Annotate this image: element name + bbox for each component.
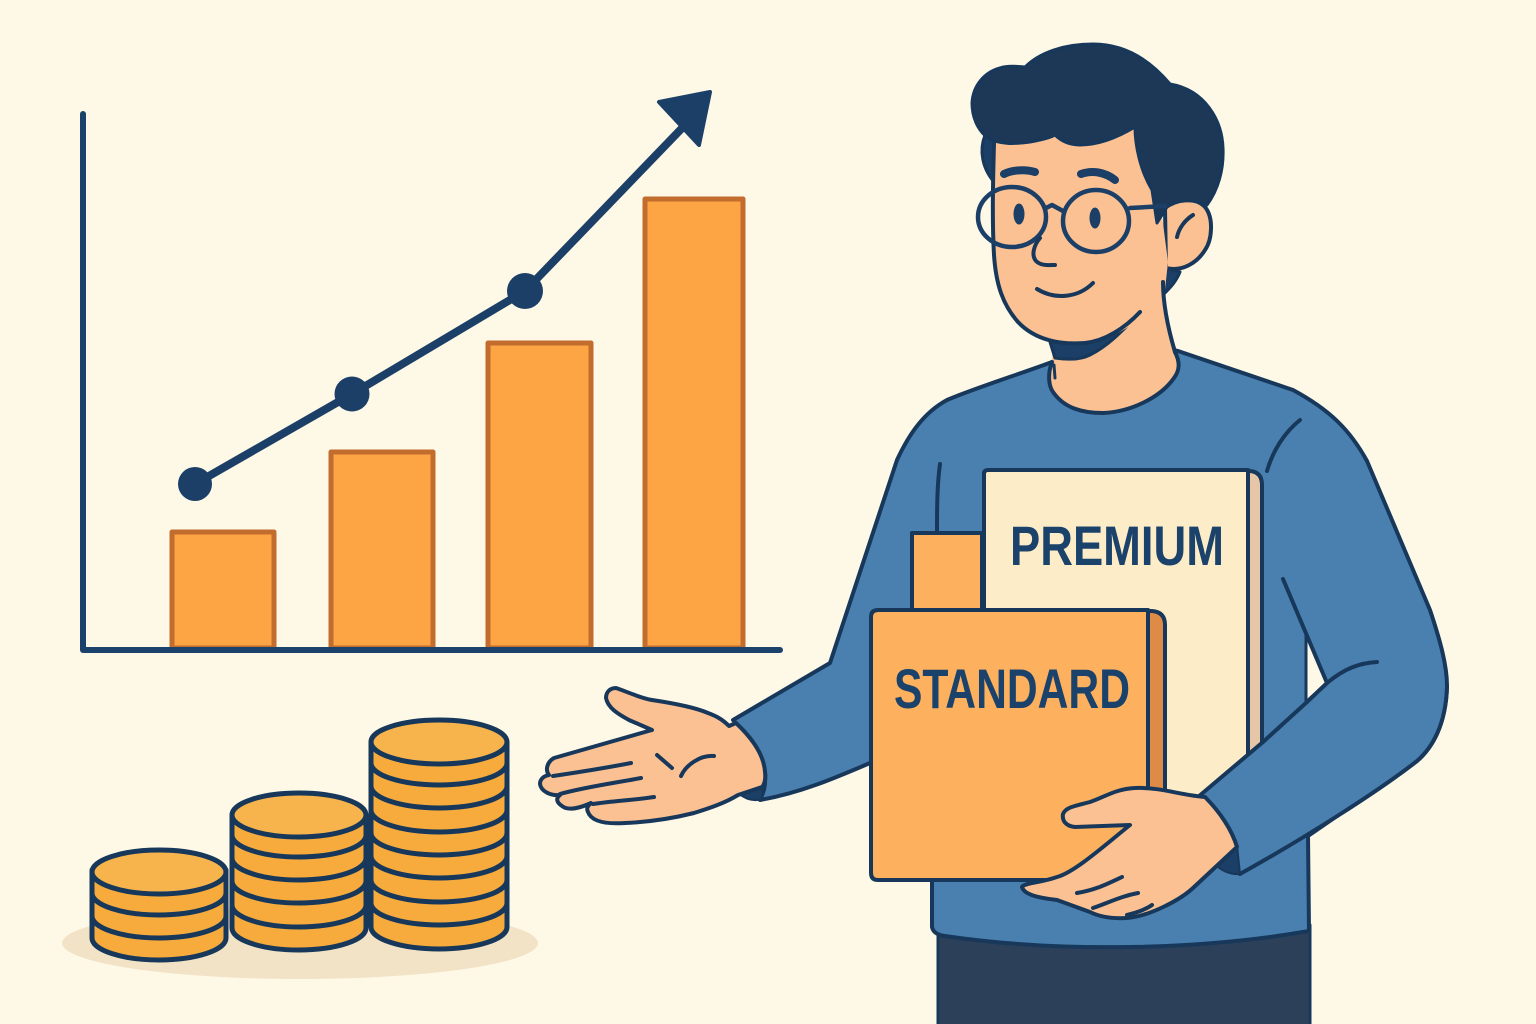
trend point 1 <box>178 467 212 501</box>
arrow head <box>659 92 710 145</box>
sweater crease left <box>937 464 940 532</box>
coin stacks <box>62 720 538 979</box>
face <box>993 110 1168 343</box>
sweater <box>733 345 1447 947</box>
back hair left <box>982 135 1000 182</box>
bar chart with rising trend <box>83 92 780 650</box>
trend point 2 <box>334 376 370 412</box>
bar 1 <box>172 532 274 648</box>
ear <box>1165 200 1211 269</box>
right hand holding books <box>1022 788 1237 918</box>
person presenting plans <box>540 44 1447 1024</box>
standard book cover <box>871 610 1148 880</box>
standard label: STANDARD <box>894 657 1130 720</box>
smile <box>1037 283 1093 296</box>
trend point 3 <box>507 273 543 309</box>
standard book <box>871 610 1165 880</box>
premium label: PREMIUM <box>1010 514 1224 577</box>
neck <box>1049 280 1179 413</box>
ground shadow <box>62 907 538 979</box>
gap between arm and torso <box>1306 633 1327 702</box>
premium book <box>984 470 1262 810</box>
collar crease <box>1054 365 1055 378</box>
tall coin stack <box>371 720 507 949</box>
chart axes <box>83 114 780 650</box>
nose <box>1033 238 1055 265</box>
jaw outline <box>993 143 1175 352</box>
left open hand <box>540 688 765 823</box>
eyebrows <box>1004 170 1115 180</box>
head <box>972 44 1223 413</box>
premium book spine <box>1240 471 1262 760</box>
forearm outlines <box>1198 579 1447 874</box>
back hair right <box>1164 268 1180 294</box>
neck shadow <box>1050 313 1140 359</box>
collar outline <box>1049 352 1179 413</box>
small coin stack <box>92 850 226 960</box>
premium book cover <box>984 470 1248 810</box>
trend line <box>195 124 686 484</box>
cuff shadow left <box>738 787 763 800</box>
standard book spine <box>1140 611 1165 800</box>
ear fold <box>1177 215 1193 237</box>
glasses <box>978 187 1165 252</box>
cuff shadow right <box>1218 845 1240 874</box>
forearm over books <box>1198 662 1447 874</box>
bar 3 <box>488 343 591 648</box>
bar 2 <box>331 452 433 648</box>
hair <box>972 44 1223 223</box>
orange tab <box>912 533 982 613</box>
eyes <box>1014 204 1100 228</box>
trousers <box>938 925 1310 1024</box>
sweater crease shoulder <box>1267 420 1300 471</box>
bar 4 <box>645 199 743 648</box>
medium coin stack <box>232 793 366 950</box>
